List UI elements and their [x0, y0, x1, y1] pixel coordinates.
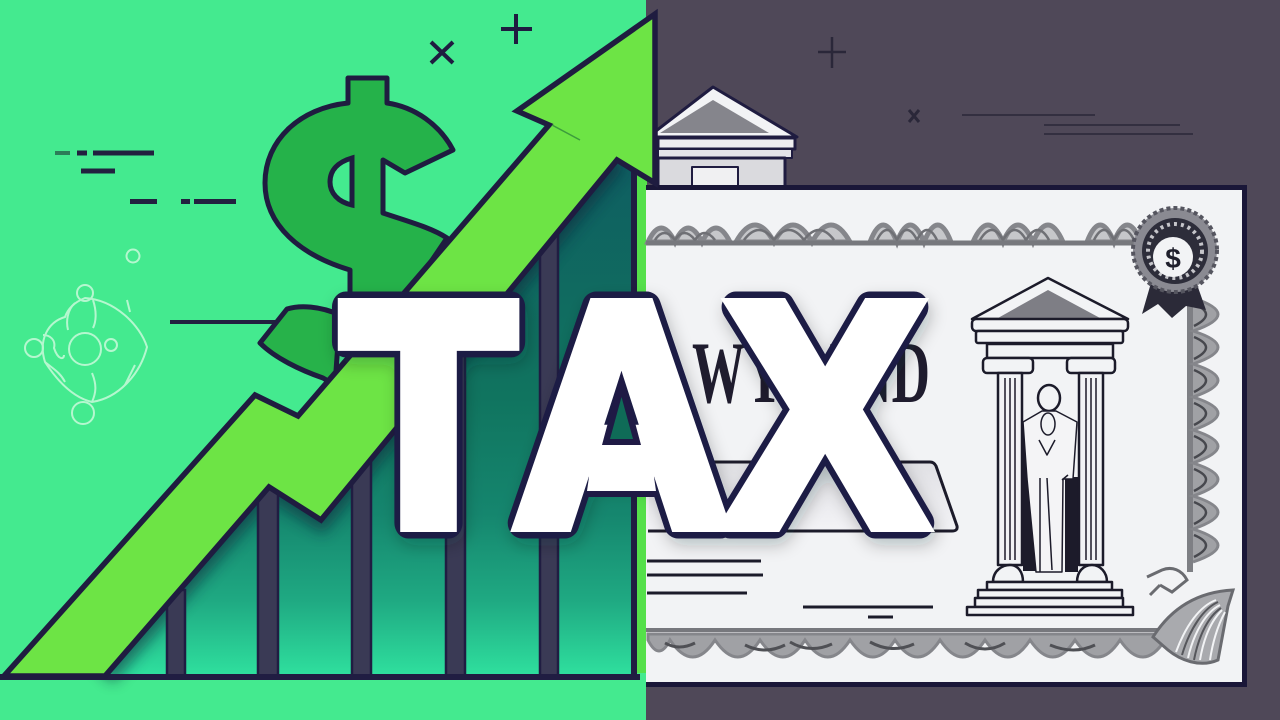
- panel: green background: [0, 0, 646, 720]
- certificate: [646, 188, 1245, 684]
- sparkles on the dark panel: [818, 37, 1193, 134]
- A crossbar and counter: [585, 372, 658, 497]
- certificate heading behind the title: WYTAND: [692, 325, 930, 422]
- title: T: [343, 240, 514, 590]
- certificate ornate border: [646, 225, 1218, 657]
- bright green strip: [637, 170, 647, 673]
- title: T: [343, 240, 514, 590]
- bar chart: [0, 160, 640, 680]
- panel: dark background: [646, 0, 1280, 720]
- icon: seal ribbon: $: [1165, 243, 1181, 274]
- icon: quill tassel: [1147, 568, 1233, 663]
- sparkles on the green panel: [431, 14, 532, 63]
- temple behind the certificate: [652, 87, 797, 188]
- icon: seal ribbon: [1133, 208, 1217, 318]
- certificate text lines: [647, 561, 933, 617]
- arrow: [4, 14, 655, 676]
- name field: [648, 462, 957, 531]
- icon: temple with figure: [967, 278, 1133, 615]
- motion lines: [55, 153, 277, 322]
- title: X: [728, 240, 924, 590]
- title: X: [728, 240, 924, 590]
- icon: outlined globe doodle: [25, 250, 147, 424]
- title: A: [515, 239, 728, 590]
- title: A: [515, 239, 728, 590]
- icon: dollar sign: [260, 78, 453, 385]
- title: [343, 239, 924, 590]
